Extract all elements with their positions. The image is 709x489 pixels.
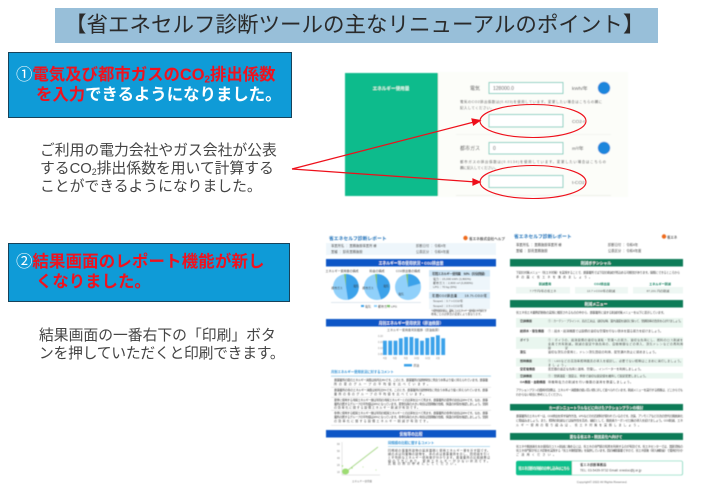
pie legend	[361, 304, 398, 308]
scatter chart	[337, 440, 490, 483]
report: diagnosis advice page: 下記の対策メニュー（省エネ対策）を実施することで、貴事業所では下記の削減が見込める可能性があります。開発にできるところから	[516, 270, 680, 274]
measures table: ①：カーテン・ブラインド、窓の工夫は、適切な時、室内温度を適切に保って、空調効率の改善を心がけましょう。	[548, 318, 683, 323]
report: energy diagnosis result page: 0.20	[378, 335, 383, 338]
measures table: ①：空調温度・湿度は、季節で適切な設定値を維持して設定変更しましょう。	[548, 373, 648, 378]
screenshot: energy input form: kWh/年	[572, 85, 588, 92]
measures table	[516, 318, 683, 384]
scatter chart: 60	[337, 443, 340, 446]
pie charts: CO2排出量の構成	[396, 268, 420, 273]
report: energy diagnosis result page: 12月	[425, 356, 431, 360]
panel: point 1 heading: ①電気及び都市ガスのCO2排出係数	[16, 66, 276, 85]
measures table: ①：LEDなどの高効率照明器具の導入を検討し、必要でない照明はこまめに消灯しましょう。	[548, 358, 683, 363]
scatter chart: と平均的なエネルギー使用量が分かります。貴事業所の比較結果は	[388, 454, 490, 460]
screenshot: energy input form: 記入してください。	[460, 105, 494, 110]
report: diagnosis advice page	[510, 233, 683, 484]
report: energy diagnosis result page: 10月	[414, 356, 420, 360]
summary cards: 年間CO2排出量 19.7t-CO2/年	[432, 293, 488, 298]
copyright: Copyright© 2022 All Rights Reserved.	[577, 480, 627, 484]
measures table: 変圧器の適正な負荷と運用、管理し、インバーターを利用しましょう。	[548, 366, 643, 371]
report: diagnosis advice page: 手の届く省エネを進めましょう。	[516, 274, 592, 279]
measures table: 給排水・衛生機器	[520, 328, 544, 333]
report: energy diagnosis result page: 省エネセルフ診断レポート	[329, 235, 387, 242]
scatter chart: エネルギー使用量	[352, 479, 373, 483]
report: diagnosis advice page: に取組みましょう。また、照明の削減などは操作性を高め、継続として、脱炭素カーボンゼロ策の導入を続けましょう。CO2削減、エネ	[516, 418, 683, 422]
report: energy diagnosis result page: 0.15	[378, 341, 383, 344]
screenshot: energy input form: 都市ガスの排出係数は(0.0134)を使用しています。変更したい場合はこちらの	[460, 159, 606, 164]
scatter chart: 比較の際の参考にしてください。	[388, 460, 458, 466]
pie charts: エネルギー使用量の構成	[325, 268, 359, 273]
measures table: 蒸気	[520, 349, 526, 354]
report: diagnosis advice page: 87,231 円の削減	[647, 288, 670, 293]
text block: point 1 description: ことができるようになりました。	[40, 179, 262, 195]
bar chart: monthly energy use	[383, 335, 445, 355]
comment section: 業所の属するグループの平均値は20%となっています。冬季負荷の大きい場合は空調機の性能、保温の状態を確認しましょう。空調	[334, 414, 488, 419]
callout: red ellipses	[480, 104, 586, 198]
text block: point 2 description: 結果画面の一番右下の「印刷」ボタ	[39, 328, 276, 344]
report: diagnosis advice page: 7.7千円/年の省エネ	[530, 288, 556, 293]
measures table: ①：給水・給湯機器では設備の適切な管理を行ない節水を図る努力を続けましょう。	[548, 328, 663, 333]
report: diagnosis advice page: CO2排出量	[594, 281, 610, 286]
scatter chart: 同規模の事業所建物の延床面積と使用エネルギー量を示す図です。	[388, 448, 490, 452]
scatter chart: 緑の点は同業種の建物を、赤の点は貴事業所を示し、回帰線を引く	[388, 451, 490, 456]
report: energy diagnosis result page: エネルギー使用量月別推移（原油換算）	[387, 327, 441, 332]
screenshot: energy input form: 128000.0	[493, 86, 514, 92]
screenshot: energy input form: エネルギー使用量	[373, 85, 410, 92]
report: energy diagnosis result page: 6月	[393, 356, 397, 360]
report: energy diagnosis result page: 月別エネルギー使用状況（原油換算）	[379, 320, 443, 326]
measures table: ①：ボイラの、給湯設備の適切な運転・管理への努力、適切な負荷にし、燃料のロス削減を	[548, 337, 683, 342]
measures table: 空調機器	[520, 373, 532, 378]
report: diagnosis advice page: 更なる省エネ・脱炭素化へ向けて	[570, 434, 623, 439]
report: diagnosis advice page: 事業所名 ： 業務施設事業所 様	[516, 242, 562, 247]
summary cards: LPG：70 kg (9%)	[433, 285, 457, 289]
report: energy diagnosis result page: 8月	[404, 356, 408, 360]
report: diagnosis advice page: エネルギー削減	[649, 281, 672, 286]
summary cards: 年間エネルギー使用量 9.0%（対全国値）	[432, 271, 487, 276]
pie legend: LPG	[391, 304, 398, 308]
comment section: 業所の冬のグループの平均値を比べています。	[334, 391, 426, 396]
panel: point 1 heading: を入力できるようになりました。	[36, 86, 282, 104]
screenshot: energy input form: t-CO2	[572, 180, 585, 186]
report: diagnosis advice page: 削減費用	[539, 281, 551, 286]
screenshot: energy input form: 0	[493, 146, 496, 152]
measures table: OA機器・自動機器	[520, 379, 546, 384]
report: diagnosis advice page: 省エネや脱炭素化をお客様のコスト削減に進めるには、省エネの専門家の知見を利用するのが有効です。省エネセンターでは、国家資格の	[516, 444, 683, 448]
screenshot: energy input form: CO2-t	[572, 119, 585, 125]
title band: 【省エネセルフ診断ツールの主なリニューアルのポイント】	[65, 13, 644, 37]
report: energy diagnosis result page: 業種 ： 卸売業務施設	[331, 249, 363, 254]
measures table: 照明機器	[520, 358, 532, 363]
screenshot: energy input form: 都市ガス	[460, 145, 480, 152]
measures table: ボイラ	[520, 337, 529, 342]
scatter chart: 線の下方にあり、使用エネルギーが少ない状況です。	[388, 458, 490, 463]
title band	[55, 8, 658, 43]
report: diagnosis advice page: 公表区分 ： 令和4年度	[608, 248, 642, 253]
comment section: 月別エネルギー使用状況に対するコメント	[331, 369, 394, 374]
text block: point 1 description: するCO2排出係数を用いて計算する	[40, 161, 274, 177]
report: diagnosis advice page: カーボンニュートラルなどに向けたアクションプランの検討	[549, 405, 644, 410]
report: diagnosis advice page: 13.7 t-CO2/年の削減	[587, 288, 616, 293]
report: diagnosis advice page: アクションプランの費用対効果は、エネルギー消費量の低い高い順に示して並べられています。削減メニューを実行する順番は、どこからでも	[516, 387, 683, 392]
report: energy diagnosis result page: 診断日付 ： 令和4年	[416, 243, 447, 248]
report: diagnosis advice page: ご活用ください。	[516, 452, 556, 456]
contact box: TEL: 03-5439-9732 Email: enedoc@j.or.jp	[580, 468, 642, 472]
report: diagnosis advice page: 貴事業所のエネルギーは、CO2排出を抑す操作方法、LPGなどの化石燃料が使われているのです。次第、アンモニアなどの次の世代の脱炭素化	[516, 413, 683, 418]
report: diagnosis advice page: 省エネセルフ診断レポート	[514, 233, 572, 240]
text block: point 1 description: ご利用の電力会社やガス会社が公表	[40, 143, 277, 159]
text block: point 1 description	[40, 142, 277, 195]
summary cards	[429, 270, 490, 316]
report: energy diagnosis result page	[325, 235, 505, 483]
pie charts: 電気	[398, 292, 404, 296]
measures table: 適切な蒸気の使用と、ドレン蒸気回収の利用、配管漏れ防止に努めましょう。	[548, 349, 658, 354]
scatter chart: 同規模の比較に関するコメント	[388, 440, 434, 445]
report: energy diagnosis result page: エネルギー等の使用状況・CO2排出量	[379, 260, 444, 266]
report: diagnosis advice page: わからない場合に参考にしてください。	[516, 392, 564, 396]
measures table: 全員で共有削減。削減の設定や熱負荷の、自動制御などの導入、蒸気ドレンなどの再利用	[548, 341, 683, 346]
screenshot: energy input form: 欄に記入してください。	[460, 165, 498, 170]
summary cards: 都市ガス：2,600 m³ (3,800%)	[433, 280, 473, 285]
report: energy diagnosis result page: 事業所名 ： 業務施設事業所 様	[331, 243, 377, 248]
pie legend: 都市ガス	[378, 304, 390, 308]
report: energy diagnosis result page: 0.10	[378, 347, 383, 350]
text block: point 2 description: ンを押していただくと印刷できます。	[39, 346, 284, 362]
report: energy diagnosis result page: 0.05	[378, 353, 383, 356]
comment section: 貴事業所の冬のエネルギー消費は前月比5%です。このとき、貴事業所の建物特性に見合う水準より低く抑えられています。貴事	[334, 387, 488, 392]
comment section	[331, 369, 491, 426]
report: energy diagnosis result page: 4月	[383, 356, 387, 360]
screenshot: energy input form	[345, 72, 628, 197]
report: energy diagnosis result page: 公表区分 ： 令和4年度	[416, 249, 450, 254]
comment section: 貴事業所の夏のエネルギー消費は前月比4%です。このとき、貴事業所の建物特性に見合う水準より低く抑えられています。貴事業	[334, 377, 488, 382]
summary cards: ※都市規模別値は、業種ごとのエネルギー使用量の平均値です	[431, 308, 487, 312]
comment section: の効率化に関する設備エネルギー削減が有効です。	[334, 404, 420, 410]
comment section: 所の夏のグループの平均値を比べています。	[334, 381, 430, 386]
text block: point 2 description	[39, 327, 284, 362]
pie charts: 料金の構成	[369, 268, 385, 273]
pie charts: 都市ガス	[331, 286, 343, 290]
panel: point 2 heading	[8, 243, 290, 302]
report: energy diagnosis result page: 気候等の比較	[400, 432, 423, 436]
measures table: ましょう。	[548, 362, 568, 367]
report: energy diagnosis result page: 2月	[436, 356, 440, 360]
comment section: の効率化に関する設備エネルギー削減が有効です。	[334, 418, 430, 423]
measures table: 設定	[548, 345, 568, 350]
panel: point 2 heading: ②結果画面のレポート機能が新し	[16, 253, 265, 271]
arrows: description to input fields	[292, 119, 480, 185]
summary cards: 電力：15,000 kWh (3,800%)	[433, 276, 471, 281]
pie charts: 都市ガス	[362, 286, 374, 290]
report: diagnosis advice page: 業種 ： 卸売業務施設	[516, 248, 548, 253]
contact box: 省エネ診断の詳細のお申し込みはこちら	[518, 466, 570, 470]
comment section: 業所の属するグループの平均値は20%となっています。夏季負荷の大きい場合は空調機の性能、保温の状態を確認しましょう。空調	[334, 401, 488, 406]
report: energy diagnosis result page: 省エネ株式会社ヘルプ	[469, 236, 505, 241]
screenshot: energy input form: m³/年	[572, 145, 584, 152]
panel: point 2 heading: くなりました。	[36, 273, 151, 291]
scatter chart: 40	[337, 457, 340, 460]
scatter chart: 10	[337, 471, 340, 474]
pie charts	[325, 268, 421, 300]
screenshot: energy input form: 電気のCO2排出係数は(0.423)を使用しています。変更したい場合はこちらの欄に	[460, 99, 602, 104]
report: diagnosis advice page: ルギー使用の取り組みは、省エネ対策を実施しましょう。	[516, 422, 641, 427]
measures table: 待機時電力の削減を行い機器の運用を徹底しましょう。	[548, 379, 633, 384]
report: diagnosis advice page: 診断日付 ： 令和4年	[608, 242, 639, 247]
contact box: 省エネ診断事務局	[580, 462, 607, 467]
measures table: 空調機器	[520, 318, 532, 323]
comment section: 夏季に使用する冷房エネルギー量は年間の冷房エネルギーとの比率を比べて見ます。貴事業所の夏季の割合は20%です。なお、貴事	[334, 397, 488, 402]
pie charts: 電気	[353, 284, 359, 288]
scatter chart: 50	[337, 450, 340, 453]
report: diagnosis advice page: 省エネ	[667, 234, 678, 240]
report: diagnosis advice page: 省エネ専門家が省エネ診断を実施する「省エネ無償診断」を提供しています。国の補助事業ですので、省エネ促進（導入補助金）で費用がかか	[516, 448, 683, 452]
summary cards: Scope2：2.5 t-CO2/年	[433, 303, 463, 308]
summary cards: 地域ごとの計算法の変更により異なります。	[431, 312, 483, 316]
contact box	[516, 461, 682, 475]
report: diagnosis advice page: 省エネ省エネ業務診断後の実施に推奨されるものの中から、貴事業所に適する削減対策メニューを以下に表示しています。	[516, 310, 666, 314]
report: diagnosis advice page: 削減ポテンシャル	[581, 260, 611, 266]
screenshot: energy input form: 電気	[470, 85, 480, 92]
pie legend: 電気	[365, 304, 371, 308]
summary cards: Scope1：3.7 t-CO2/年	[433, 298, 463, 303]
report: diagnosis advice page: 削減メニュー	[585, 302, 608, 306]
pie charts: 電気	[383, 284, 389, 288]
measures table: 受変電機器	[520, 366, 535, 371]
report: energy diagnosis result page: 原油	[414, 364, 419, 368]
panel: point 1 heading	[8, 52, 292, 118]
scatter chart: 20	[337, 464, 340, 467]
comment section: 冬季に使用する暖房エネルギー量は年間の暖房エネルギーとの比率を比べて見ます。貴事業所の冬季の割合は20%です。なお、貴事	[334, 410, 488, 415]
